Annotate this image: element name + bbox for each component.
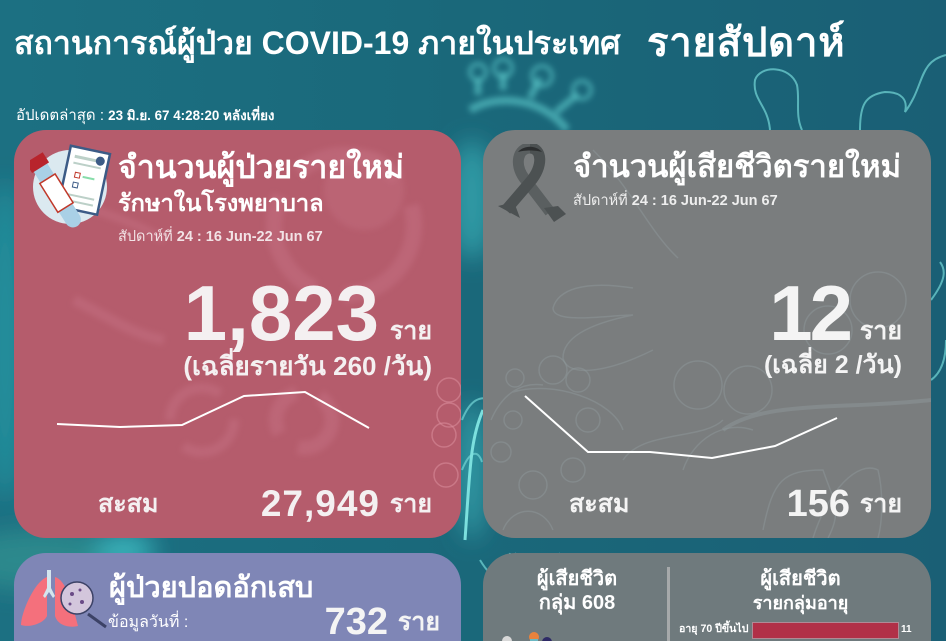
unit: pneumonia: ราย — [398, 608, 440, 636]
bar label: อายุ 70 ปีขึ้นไป — [679, 623, 748, 635]
icon: test tube and clipboard — [30, 144, 112, 228]
week label: สัปดาห์ที่ 24 : 16 Jun-22 Jun 67 — [573, 193, 778, 209]
unit: cumulative: ราย — [860, 490, 902, 518]
title: weekly: รายสัปดาห์ — [647, 21, 845, 65]
unit: ราย — [860, 317, 902, 345]
daily average: (เฉลี่ยรายวัน 260 /วัน) — [183, 351, 432, 381]
number: new cases: 1,823 — [184, 269, 379, 357]
number: cumulative: 27,949 — [261, 483, 380, 524]
icon: group 608 people — [502, 632, 552, 641]
week label: สัปดาห์ที่ 24 : 16 Jun-22 Jun 67 — [118, 229, 323, 245]
bar value: 11 — [901, 624, 912, 635]
bar fill — [752, 622, 899, 639]
last updated: อัปเดตล่าสุด : 23 มิ.ย. 67 4:28:20 หลังเที่ยง — [16, 107, 274, 124]
panel: new deaths — [483, 130, 931, 538]
bar: age 70 plus — [679, 620, 912, 639]
icon: black ribbon — [498, 144, 566, 222]
label: cumulative: สะสม — [569, 490, 629, 518]
heading: pneumonia: ผู้ป่วยปอดอักเสบ — [109, 572, 313, 604]
icon: lungs with magnifier — [21, 570, 107, 628]
divider — [667, 567, 670, 641]
heading: new deaths: จำนวนผู้เสียชีวิตรายใหม่ — [573, 149, 901, 184]
heading: age groups: ผู้เสียชีวิต — [760, 568, 841, 590]
number: new deaths: 12 — [769, 269, 850, 357]
heading: age groups — [753, 568, 848, 614]
line chart: new deaths — [524, 395, 838, 459]
date label: ข้อมูลวันที่ : — [108, 614, 188, 631]
panel virus texture — [76, 149, 461, 488]
panel: pneumonia — [14, 553, 461, 641]
title: สถานการณ์ผู้ป่วย COVID-19 ภายในประเทศ — [14, 25, 620, 61]
number: cumulative: 156 — [787, 483, 850, 525]
heading: group 608 — [537, 568, 617, 615]
heading: new patients: จำนวนผู้ป่วยรายใหม่ — [118, 149, 404, 185]
label: cumulative: สะสม — [98, 490, 158, 518]
unit: ราย — [390, 317, 432, 345]
heading: age groups: รายกลุ่มอายุ — [753, 593, 848, 613]
panel: new patients — [14, 130, 461, 538]
heading: group 608: กลุ่ม 608 — [539, 592, 615, 614]
panel virus texture — [490, 150, 931, 538]
daily average: (เฉลี่ย 2 /วัน) — [764, 351, 902, 379]
subheading: hospital: รักษาในโรงพยาบาล — [118, 191, 324, 217]
panel: death groups — [483, 553, 931, 641]
unit: cumulative: ราย — [390, 490, 432, 518]
heading: group 608: ผู้เสียชีวิต — [537, 568, 617, 590]
line chart: new cases — [56, 391, 370, 429]
